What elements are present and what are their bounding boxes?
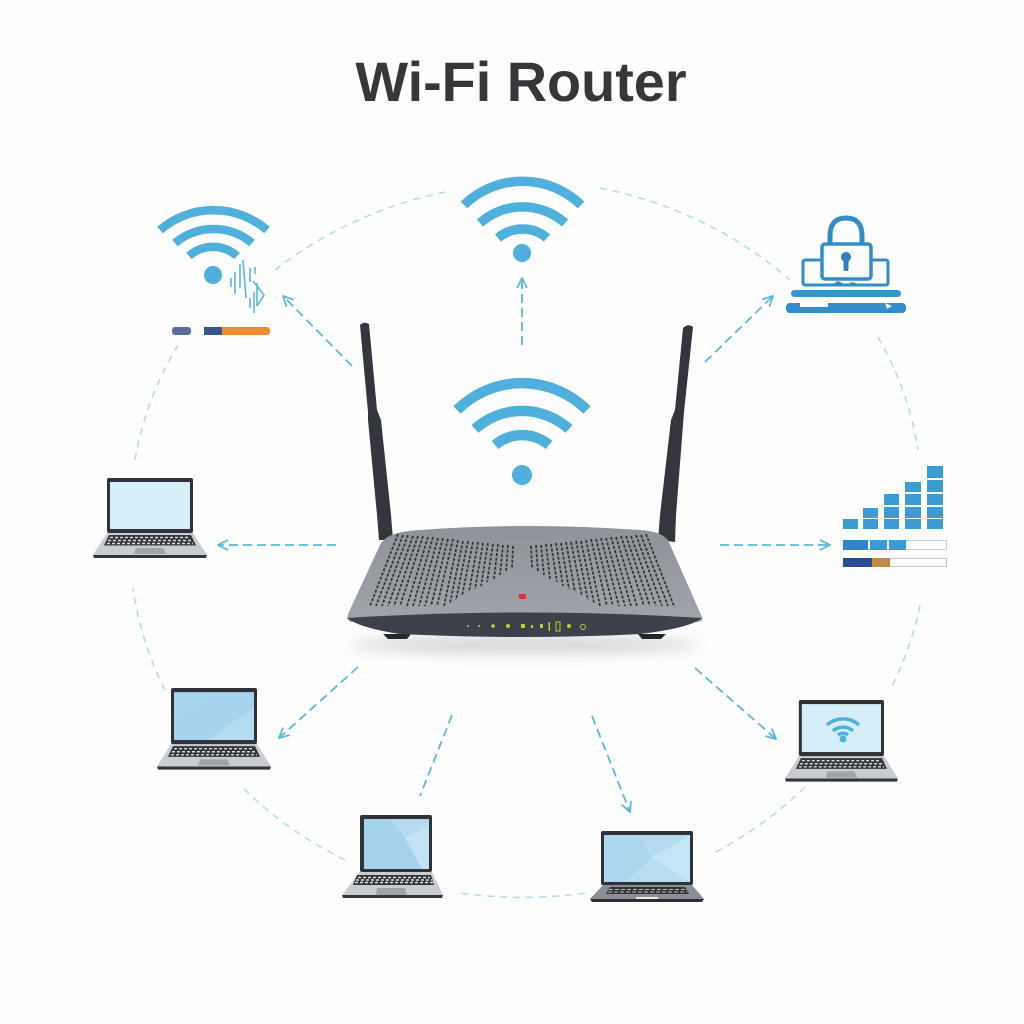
laptop: lower right with wifi screen [785,700,898,782]
dashed arrows from router to devices [218,278,830,812]
laptop: bottom right [590,831,704,902]
icon: signal strength bars [843,466,946,567]
dashed outer ring [133,188,920,897]
router front panel [347,612,702,637]
icon: top wifi signal [464,181,581,262]
router top surface [347,526,702,622]
router shadow [350,637,700,653]
router perforated vents [370,534,674,606]
left antenna [360,323,393,540]
title: Wi-Fi Router [355,50,687,113]
icon: padlock security [786,218,906,313]
icon: central wifi signal [457,383,587,485]
icon: upper-left wifi signal with waveform and status bar [160,210,270,335]
router status LEDs [467,622,586,631]
router [347,323,702,653]
router logo [519,594,526,599]
router feet [383,634,666,639]
laptop: lower left [157,688,271,770]
laptop: bottom left [342,815,443,898]
right antenna [658,325,693,542]
laptop: left [93,478,207,558]
